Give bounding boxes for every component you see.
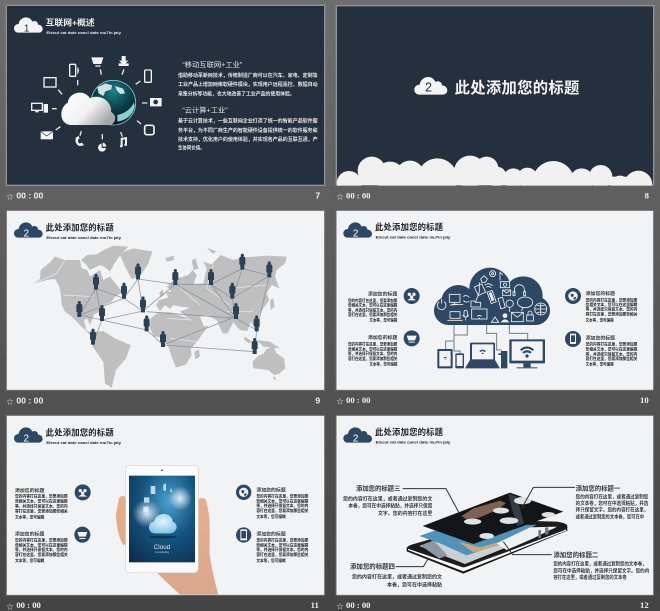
illustration: tablet (126, 466, 198, 573)
text block: left bottom: 您的内容打在这里，您要添加那 (15, 536, 68, 542)
subtitle: Elecut cat date cancl date mu7in jaly (46, 31, 122, 35)
callout: title two: 您可在中选择粘贴，并选择只保留文字。您的内 (553, 567, 649, 574)
panel: slide 11 tablet (6, 415, 325, 611)
text block: left top (348, 291, 398, 322)
text block: mobile internet + industry: “移动互联网+工业” (182, 60, 243, 69)
callout: title one: 择只保留文字。您的内容打在这里， (576, 507, 648, 514)
footer: 12 (640, 600, 649, 610)
text block: cloud computing + industry: 技术支持，优化用户的使用体验，并实现各产品的互联互通，产 (178, 136, 318, 143)
text block: mobile internet + industry: 采集分析等功能，也大地改善了工业产品的使用体验。 (178, 90, 295, 97)
text block: left top: 文本等，您可编辑 (369, 316, 397, 322)
illustration: big cloud (434, 268, 550, 325)
text block: right bottom (256, 531, 309, 563)
footer: 9 (315, 396, 320, 406)
section heading: 此处添加您的标题 (455, 79, 579, 97)
callout: title four: 本卷，您可在中选择粘贴 (387, 581, 442, 588)
illustration: tablet: Cloud (154, 544, 171, 551)
footer (7, 396, 320, 406)
footer: 8 (645, 190, 650, 200)
callout: title one: 您的内容打在这里，或者通过复制您 (576, 494, 648, 501)
callout: title three: 文字。您的内容打在这里 (378, 510, 432, 517)
text block: mobile internet + industry: 工业产品上增加网络软硬件模块，实现用户远程遥控、数据自动 (178, 81, 318, 88)
text block: left top: 文本等，您可编辑 (15, 513, 44, 519)
callout: title three: 本卷，您可在中选择粘贴，并选择只保留 (348, 502, 432, 509)
footer: 7 (315, 191, 320, 201)
text block: left top: 您的内容打在这里，您要添加那 (348, 297, 398, 303)
panel: slide 9 world map (6, 210, 325, 406)
icon: header cloud: 2 (24, 433, 30, 444)
text block: cloud computing + industry: 基于云计算技术，一些互联网企业打造了统一的智能产品软件服 (178, 118, 318, 125)
text block: left bottom: 您的内容打在这里，您要添加那 (348, 340, 398, 346)
icon: header cloud: 2 (353, 228, 359, 239)
text block: right bottom (586, 334, 638, 367)
icon: numbered cloud 2: 2 (425, 81, 432, 95)
footer: ☆ (337, 397, 344, 405)
heading: 此处添加您的标题 (46, 222, 114, 232)
callout: title four: 添加您的标题四 (350, 562, 395, 571)
footer: ☆ (7, 398, 14, 406)
icon: header cloud: 2 (24, 228, 30, 239)
cloud band (337, 156, 652, 203)
devices (437, 339, 545, 368)
icon: header cloud (14, 222, 43, 239)
text block: left bottom: 些相关文本，您可以在这里编辑 (348, 345, 397, 351)
text block: right bottom: 等，并选择只保留文本。您的内 (586, 350, 637, 356)
footer: 00 : 00 (346, 190, 371, 200)
panel: slide 12 phone layers (336, 415, 654, 610)
text block: left top: 添加您的标题 (15, 487, 44, 494)
illustration: layered phone (407, 493, 567, 574)
footer (7, 191, 320, 201)
panel: slide 7 overview (6, 5, 325, 201)
text block: left top: 容打在这里，您要添加那些相关 (15, 507, 68, 513)
illustration: tablet: computing (155, 550, 169, 554)
callout: title one: 的文本卷，您可在中选择粘贴，并选 (576, 500, 648, 507)
text block: right bottom: 容打在这里，您要添加那些相关 (256, 551, 309, 557)
text block: left bottom: 些相关文本，您可以在这里编辑 (15, 541, 68, 547)
leader lines (396, 487, 575, 567)
footer: 00 : 00 (346, 395, 371, 405)
callout: title two: 容打在这里，或者通过复制您的文本卷 (553, 574, 627, 581)
text block: right top: 添加您的标题 (586, 290, 615, 297)
text block: right top: 容打在这里，您要添加那些相关 (586, 310, 638, 316)
text block: cloud computing + industry: 生协同价值。 (178, 145, 205, 152)
callout: title three: 您的内容打在这里，或者通过复制您的文 (343, 496, 432, 503)
text block: left top: 您的内容打在这里，您要添加那 (15, 493, 68, 499)
footer: ☆ (7, 193, 14, 201)
text block: left bottom: 容打在这里，您要添加那些相关 (15, 551, 68, 557)
callout: title two: 您的内容打在这里，或者通过复制您的文本卷， (553, 561, 647, 568)
text block: mobile internet + industry (178, 60, 318, 97)
callout: title one (576, 483, 648, 520)
text block: right top: 等，并选择只保留文本。您的内 (256, 502, 308, 508)
footer: 00 : 00 (16, 191, 43, 201)
people markers (76, 254, 272, 354)
map borders (32, 260, 267, 342)
icon: numbered cloud 1 (14, 17, 43, 34)
text block: left top: 些相关文本，您可以在这里编辑 (348, 302, 397, 308)
icon: header cloud: 2 (353, 433, 359, 444)
small arrows (52, 69, 147, 139)
text block: left bottom: 等，并选择只保留文本。您的内 (15, 546, 68, 552)
text block: right top (586, 290, 638, 322)
subtitle: Elecut cat date cancl date mu7in jaly (46, 441, 122, 445)
icon: header cloud (343, 222, 372, 239)
text block: left bottom: 文本等，您可编辑 (369, 361, 397, 367)
icon ring around the cloud (32, 56, 162, 152)
callout: title three: 添加您的标题三 (356, 484, 400, 493)
icon: numbered cloud 1: 1 (24, 23, 30, 34)
heading: 互联网+概述 (46, 18, 95, 28)
text block: right bottom: 您的内容打在这里，您要添加那 (586, 341, 638, 347)
subtitle: Elecut cat date cancl date mu7in jaly (46, 236, 122, 240)
footer: 10 (640, 395, 649, 405)
footer: 00 : 00 (16, 396, 43, 406)
text block: left top: 等，并选择只保留文本。您的内 (348, 306, 397, 312)
text block: right top: 容打在这里，您要添加那些相关 (256, 507, 309, 513)
footer: 00 : 00 (16, 600, 41, 610)
network lines (79, 268, 269, 352)
illustration: white cloud (61, 93, 115, 125)
footer (337, 600, 649, 610)
footer: 00 : 00 (346, 600, 371, 610)
text block: right top: 些相关文本，您可以在这里编辑 (586, 301, 637, 307)
text block: left top: 添加您的标题 (368, 291, 397, 298)
text block: left bottom (348, 334, 398, 367)
text block: mobile internet + industry: 借助移动革新网技术，传统制造厂商可以在汽车、家电、定制等 (178, 72, 318, 79)
icon: header cloud (14, 427, 43, 444)
text block: left top (15, 487, 68, 519)
icon: numbered cloud 2 (414, 77, 447, 95)
callout: title two: 添加您的标题二 (553, 550, 598, 559)
callout: title two (553, 550, 649, 581)
text block: right top: 您的内容打在这里，您要添加那 (256, 492, 309, 498)
text block: left bottom: 容打在这里，您要添加那些相关 (348, 355, 398, 361)
footer (337, 190, 650, 201)
text block: left top: 等，并选择只保留文本。您的内 (15, 502, 68, 508)
text block: cloud computing + industry: 务平台，为不同厂商生产的智能硬件设备提供统一的软件服务和 (178, 127, 318, 134)
footer: 11 (311, 600, 319, 610)
callout: title four (350, 562, 442, 588)
callout: title four: 您的内容打在这里，或者通过复制您的文 (352, 574, 442, 581)
subtitle: Elecut cat date cancl date mu7in jaly (376, 236, 451, 240)
text block: right bottom: 些相关文本，您可以在这里编辑 (256, 541, 308, 547)
text block: right top: 文本等，您可编辑 (586, 316, 614, 322)
heading: 此处添加您的标题 (375, 222, 444, 232)
text block: right bottom: 容打在这里，您要添加那些相关 (586, 355, 638, 361)
text block: right top: 添加您的标题 (256, 487, 286, 494)
heading: 此处添加您的标题 (46, 427, 114, 437)
text block: left bottom: 添加您的标题 (368, 334, 397, 341)
text block: right top: 您的内容打在这里，您要添加那 (586, 296, 638, 302)
world map (32, 246, 287, 388)
text block: right bottom: 文本等，您可编辑 (256, 557, 286, 563)
footer: ☆ (337, 193, 344, 201)
text block: left bottom: 添加您的标题 (15, 531, 44, 538)
text block: right top: 些相关文本，您可以在这里编辑 (256, 497, 308, 503)
text block: right bottom: 等，并选择只保留文本。您的内 (256, 546, 308, 552)
panel: slide 10 cloud network (336, 210, 654, 405)
text block: right bottom: 添加您的标题 (586, 334, 615, 341)
callout: title three (343, 484, 432, 517)
text block: right bottom: 添加您的标题 (256, 531, 286, 538)
text block: left bottom: 文本等，您可编辑 (15, 557, 44, 563)
footer: ☆ (337, 602, 344, 610)
text block: right bottom: 文本等，您可编辑 (586, 361, 614, 367)
connecting wires (446, 325, 528, 354)
subtitle: Elecut cat date cancl date mu7in jaly (376, 441, 451, 445)
text block: right top: 文本等，您可编辑 (256, 513, 286, 519)
text block: right bottom: 您的内容打在这里，您要添加那 (256, 536, 309, 542)
text block: right top: 等，并选择只保留文本。您的内 (586, 306, 637, 312)
footer (7, 600, 319, 611)
icon badges (404, 288, 581, 347)
text block: left top: 容打在这里，您要添加那些相关 (348, 311, 398, 317)
text block: right top (256, 487, 309, 519)
illustration: globe (91, 80, 136, 125)
panel: slide 8 section title (330, 6, 660, 206)
text block: cloud computing + industry: “云计算+工业” (182, 106, 228, 115)
text block: left bottom: 等，并选择只保留文本。您的内 (348, 350, 397, 356)
icon badges (74, 484, 251, 543)
icon: header cloud (343, 427, 372, 444)
band below clouds (330, 186, 660, 206)
illustration: hand (116, 496, 218, 594)
heading: 此处添加您的标题 (375, 427, 444, 437)
text block: left bottom (15, 531, 68, 563)
text block: cloud computing + industry (178, 106, 318, 152)
footer: ☆ (7, 603, 14, 611)
text block: right bottom: 些相关文本，您可以在这里编辑 (586, 345, 637, 351)
callout: title one: 或者通过复制您的文本卷，您可在中 (576, 513, 644, 520)
callout: title one: 添加您的标题一 (576, 483, 621, 492)
cloud device icons (437, 271, 547, 322)
text block: left top: 些相关文本，您可以在这里编辑 (15, 498, 68, 504)
footer (337, 395, 649, 405)
